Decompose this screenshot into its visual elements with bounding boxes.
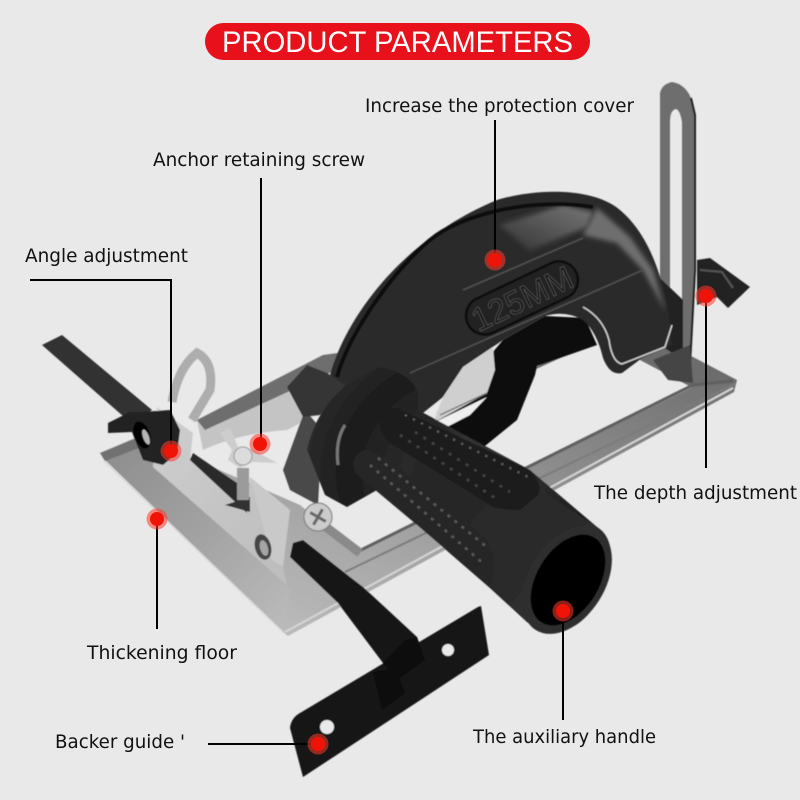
auxiliary handle [307, 367, 630, 650]
protection cover [330, 192, 672, 450]
title: product parameters: PRODUCT PARAMETERS [222, 26, 573, 59]
vertical depth guide [653, 82, 695, 383]
callout: depth adjustment [593, 286, 797, 504]
callout: auxiliary handle: The auxiliary handle [472, 726, 656, 748]
dark arm and collar knob [283, 365, 345, 505]
ring opening [433, 347, 495, 423]
callout: thickening floor: Thickening floor [86, 642, 237, 664]
product: angle grinder cutting stand [42, 82, 750, 777]
callout: thickening floor [86, 508, 237, 664]
bracket [153, 407, 290, 585]
callout: backer guide: Backer guide ' [55, 731, 185, 753]
callout: angle adjustment [25, 245, 188, 462]
round screw [304, 503, 332, 531]
right knob [697, 258, 750, 308]
callout: anchor retaining screw: Anchor retaining screw [153, 149, 365, 171]
callout: protection cover: Increase the protection cover [365, 95, 634, 117]
fence plate [290, 606, 489, 777]
base plate frame [100, 332, 737, 636]
wing screw [220, 428, 277, 512]
callout: backer guide [55, 731, 328, 754]
angle plate [172, 353, 211, 420]
callout: auxiliary handle [472, 600, 656, 748]
cover ring and arch interior [433, 316, 597, 450]
ruler strip upper [42, 335, 152, 424]
callout: angle adjustment: Angle adjustment [25, 245, 188, 267]
left knob [108, 410, 180, 465]
125MM badge: 125MM [466, 259, 579, 338]
callout: anchor retaining screw [153, 149, 365, 454]
callout: depth adjustment: The depth adjustment [593, 482, 797, 504]
ruler strip lower [290, 540, 425, 680]
callout: protection cover [365, 95, 634, 270]
